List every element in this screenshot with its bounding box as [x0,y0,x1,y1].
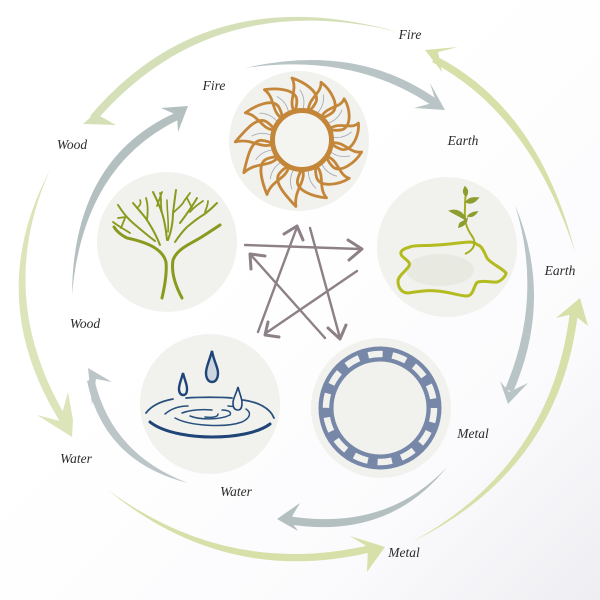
outer arrow: fire to wood [83,17,398,125]
puddle speckle [406,254,474,286]
panel: earth puddle and sprout [377,177,517,317]
puddle outline [398,242,506,296]
inner arrow: wood to fire [72,106,188,295]
labels: Fire [398,27,421,42]
panel: water drops and ripples [140,334,280,474]
tree [113,190,220,298]
labels: Wood [57,137,87,152]
sun rays [235,78,362,206]
inner arrow: metal to water [277,467,447,531]
labels: Earth [447,133,479,148]
labels: Metal [387,545,420,560]
ripples [146,397,274,437]
labels: Water [220,484,253,499]
labels: Earth [544,263,576,278]
panel: metal chain [311,338,451,478]
outer arrow: wood to water [19,170,73,437]
inner arrow: earth to metal [500,205,534,404]
sun ring [272,110,332,170]
five-element star arrows [245,226,362,339]
labels [57,27,576,560]
inner arrow: water to wood [87,368,188,483]
outer arrow: water to metal [108,490,385,572]
outer arrow: metal to earth [412,298,588,542]
panel: fire sun [229,71,369,211]
labels: Wood [70,316,100,331]
outer arrow: earth to fire [425,47,575,252]
drops [179,351,242,410]
labels: Metal [456,426,489,441]
labels: Fire [202,78,225,93]
panel: wood tree [97,172,237,312]
labels: Water [60,451,93,466]
sprout [450,187,478,254]
inner arrow: fire to earth [245,60,445,110]
chain ring [326,354,434,462]
chain link openings [326,354,434,462]
